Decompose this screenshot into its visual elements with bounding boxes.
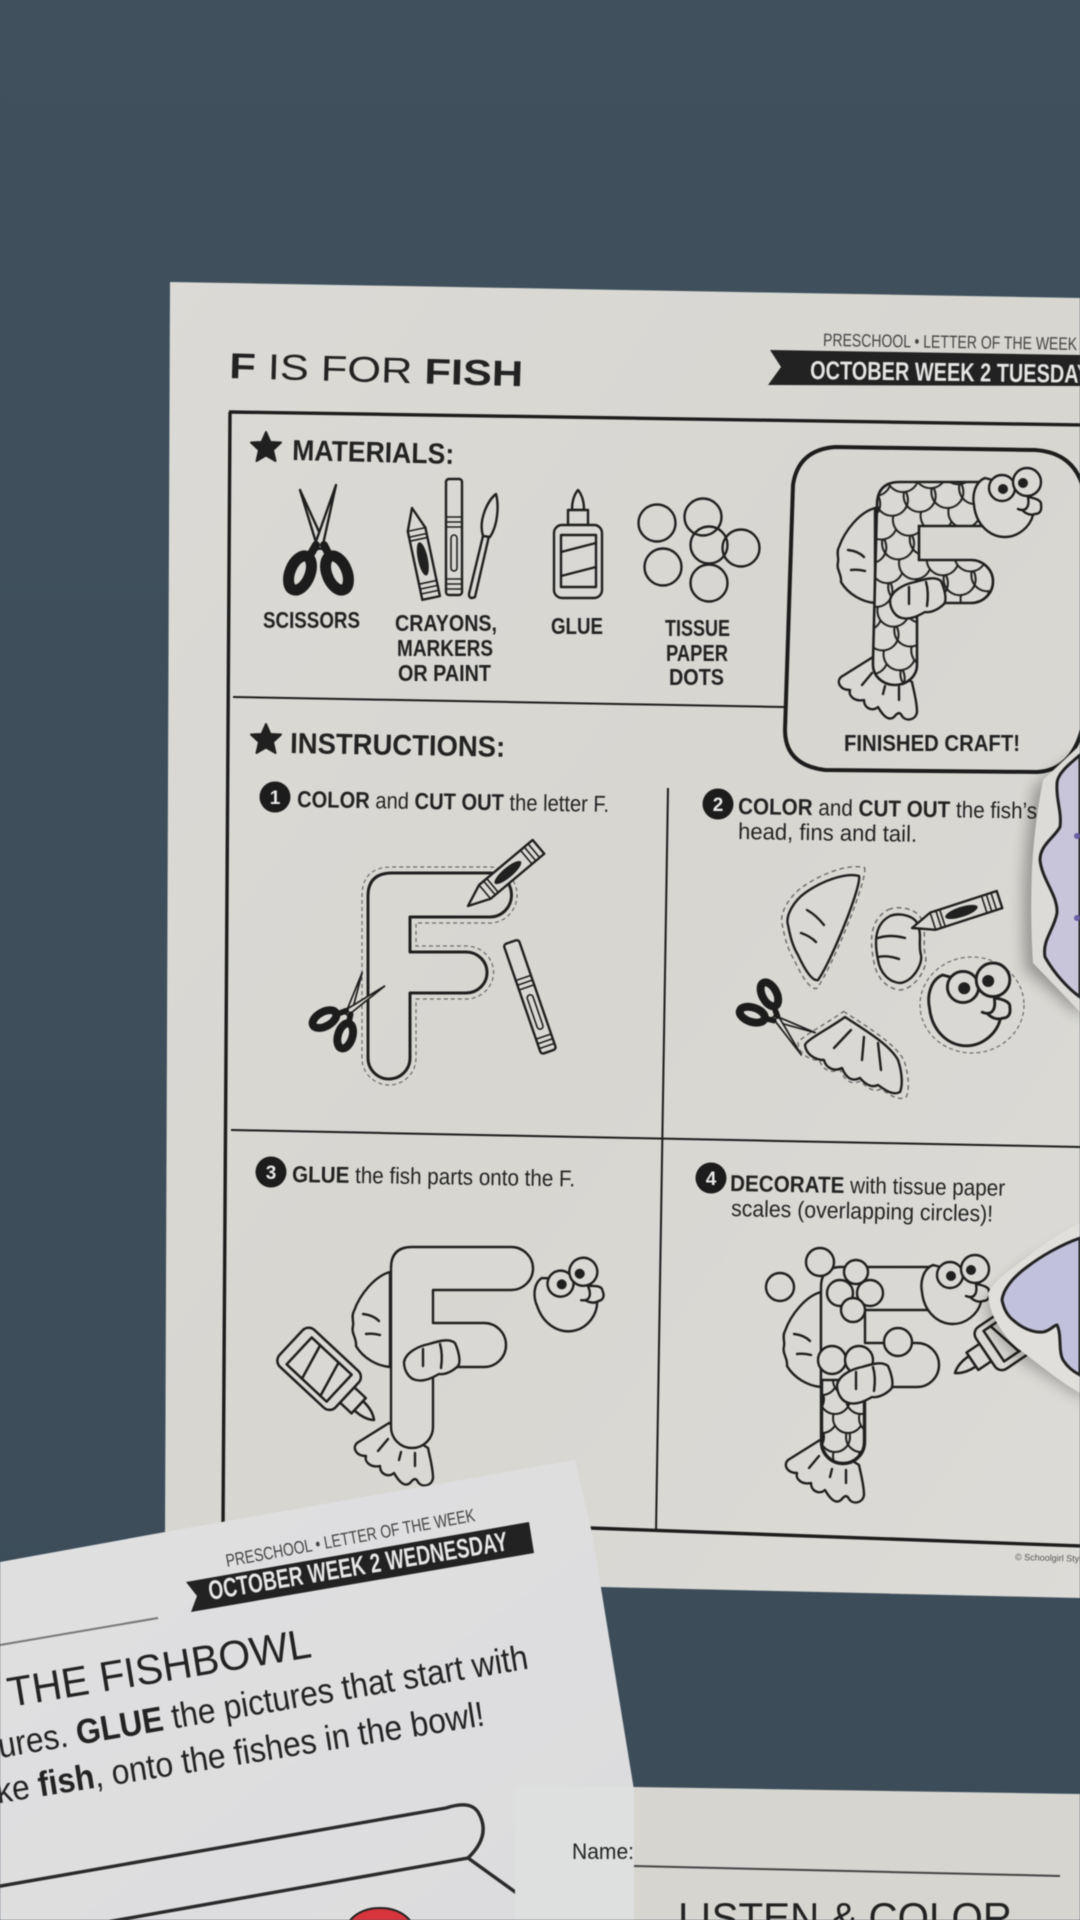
material: scissors: SCISSORS [263,607,360,633]
panel: finished craft: FINISHED CRAFT! [844,730,1020,756]
materials heading: MATERIALS: [292,435,455,471]
step 3: 3 [266,1163,276,1184]
instructions heading: INSTRUCTIONS: [290,728,505,764]
material: tissue paper dots: PAPER [666,640,728,666]
material: scissors [263,485,360,633]
step 4: DECORATE with tissue paper [730,1170,1006,1201]
material: tissue paper dots [638,498,760,690]
step 1: COLOR and CUT OUT the letter F. [297,786,609,817]
name rule fragment [0,1618,158,1645]
sheet ribbon [186,1522,534,1612]
sheet instructions: ures. GLUE the pictures that start with [0,1638,531,1766]
step 1 [260,782,609,1085]
step 2: COLOR and CUT OUT the fish’s [738,793,1037,824]
step 1: 1 [270,788,281,809]
material: tissue paper dots: DOTS [669,664,724,690]
sheet instructions: ke fish, onto the fishes in the bowl! [0,1695,487,1811]
step 4: scales (overlapping circles)! [731,1195,993,1226]
materials heading [251,432,455,471]
step 4: 4 [706,1169,717,1190]
panel: listen and color sheet [515,1787,1080,1920]
name rule [634,1866,1060,1876]
step 2 [702,788,1037,1098]
material: crayons, markers, paint: MARKERS [397,635,493,661]
cut-out purple fish piece upper [1023,745,1080,1018]
material: glue [551,490,603,639]
material: tissue paper dots: TISSUE [665,615,730,641]
material: crayons, markers, paint: OR PAINT [398,660,491,686]
name label: Name: [572,1839,634,1864]
sheet heading: THE FISHBOWL [4,1619,314,1716]
step 3 [256,1156,610,1485]
worksheet frame and dividers [223,412,1080,1546]
sheet tag line: PRESCHOOL • LETTER OF THE WEEK [224,1505,476,1571]
sheet ribbon: OCTOBER WEEK 2 WEDNESDAY [206,1526,510,1606]
step 4 [696,1162,1063,1502]
step 2: 2 [713,795,723,816]
material: crayons, markers, paint [395,479,498,686]
material: glue: GLUE [551,613,603,639]
step 2: head, fins and tail. [738,818,917,847]
title: F IS FOR FISH [229,345,524,394]
panel: main worksheet Tuesday [165,282,1080,1598]
cut-out purple fish piece lower [984,1223,1080,1401]
panel: finished craft [785,447,1080,772]
material: crayons, markers, paint: CRAYONS, [395,610,497,636]
panel: Wednesday fishbowl sheet [0,1460,634,1920]
fishbowl outline [0,1805,518,1920]
step 3: GLUE the fish parts onto the F. [292,1161,575,1191]
